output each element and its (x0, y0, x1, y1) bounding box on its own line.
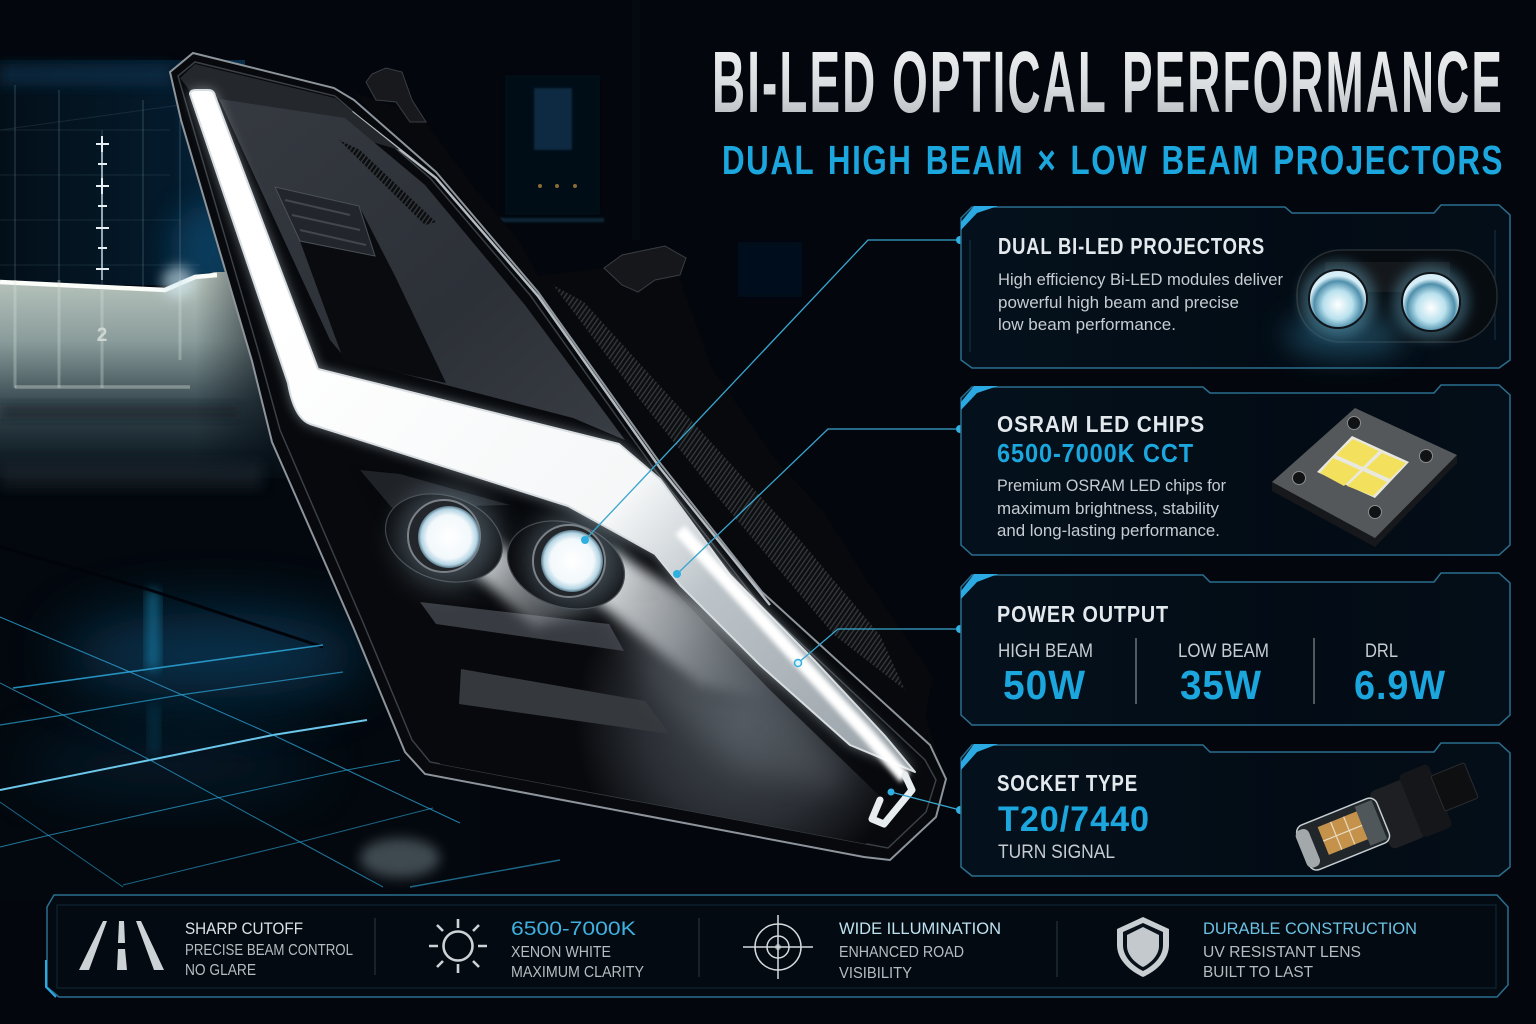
feature: colour temperature: 6500-7000K (511, 919, 636, 940)
callout line: power (794, 625, 964, 666)
rear housing silhouette (352, 92, 946, 780)
heading: SOCKET TYPE (997, 770, 1138, 796)
corner accent (961, 574, 998, 599)
feature: sharp cutoff (79, 919, 353, 979)
DRL hooked tip (872, 775, 912, 824)
DRL light bar (190, 90, 915, 824)
bar frame (47, 895, 1508, 997)
carbon textured band (553, 285, 905, 690)
light beams (455, 538, 600, 628)
panel: socket type (961, 743, 1510, 882)
heading: OSRAM LED CHIPS (997, 411, 1205, 437)
image: led chip board (1272, 408, 1457, 547)
panel frame (961, 573, 1510, 725)
socket use: TURN SIGNAL (998, 842, 1115, 863)
smoky beam haze (600, 590, 850, 790)
description: low beam performance. (998, 315, 1176, 334)
panel frame (961, 205, 1510, 368)
feature: colour temperature (429, 919, 644, 981)
description: maximum brightness, stability (997, 499, 1219, 518)
image: twin projector lenses (1285, 250, 1497, 357)
feature: sharp cutoff: PRECISE BEAM CONTROL (185, 942, 353, 959)
plastic mount right (604, 246, 686, 292)
feature: colour temperature: MAXIMUM CLARITY (511, 964, 644, 981)
stat: drl: 6.9W (1354, 662, 1446, 708)
lens outer shell (170, 53, 946, 860)
panel: osram led chips (961, 385, 1510, 555)
panel frame (961, 743, 1510, 876)
hatched strip (339, 140, 436, 225)
feature: wide illumination: VISIBILITY (839, 965, 912, 982)
description: Premium OSRAM LED chips for (997, 476, 1226, 495)
feature: wide illumination: ENHANCED ROAD (839, 944, 964, 961)
dark projector recess (345, 462, 660, 610)
aiming grid on wall (0, 85, 200, 400)
feature: durable construction: BUILT TO LAST (1203, 964, 1313, 981)
panel: bottom feature bar (46, 895, 1508, 997)
corner accent (961, 744, 998, 770)
stat: low beam: LOW BEAM (1178, 641, 1269, 662)
stat: drl (1354, 641, 1446, 708)
stat: drl: DRL (1365, 641, 1398, 662)
plastic mount top (366, 68, 426, 122)
chrome diagonal highlight (352, 112, 770, 605)
feature: durable construction (1117, 917, 1417, 981)
upper dark recess (275, 187, 446, 383)
corner accent (961, 386, 998, 410)
feature: sharp cutoff: SHARP CUTOFF (185, 919, 303, 938)
lower smoked compartment (345, 462, 890, 844)
reflective floor with blue grid (0, 462, 560, 900)
panel: dual bi-led projectors (961, 205, 1510, 368)
icon: road (79, 921, 164, 970)
feature: durable construction: UV RESISTANT LENS (1203, 944, 1361, 961)
icon: target (743, 915, 813, 979)
headlight assembly (170, 53, 946, 860)
top bezel (180, 64, 400, 150)
trim wing (360, 470, 510, 508)
callout line: socket (888, 788, 964, 814)
stat: high beam: 50W (1003, 662, 1086, 708)
colour temperature: 6500-7000K CCT (997, 438, 1194, 468)
headlight beam pattern on wall: 2 (97, 325, 107, 346)
feature: colour temperature: XENON WHITE (511, 944, 611, 961)
heading: DUAL BI-LED PROJECTORS (998, 233, 1265, 259)
stat: low beam: 35W (1180, 662, 1262, 708)
socket code: T20/7440 (998, 800, 1150, 839)
icon: shield (1117, 917, 1169, 977)
right projector (496, 507, 636, 623)
callout line: chips (673, 425, 964, 578)
callout line: projectors (581, 236, 964, 544)
stat: low beam (1178, 641, 1269, 708)
description: High efficiency Bi-LED modules deliver (998, 270, 1283, 289)
heading: POWER OUTPUT (997, 601, 1169, 627)
stat: high beam: HIGH BEAM (998, 641, 1093, 662)
feature: durable construction: DURABLE CONSTRUCTION (1203, 919, 1417, 938)
corner accent (961, 206, 998, 230)
feature: wide illumination: WIDE ILLUMINATION (839, 919, 1001, 938)
image: t20 bulb (1289, 750, 1485, 882)
inner chrome edge (178, 62, 936, 848)
lower slat two (459, 669, 670, 734)
description: and long-lasting performance. (997, 521, 1220, 540)
lower slat one (420, 602, 624, 651)
headlight beam pattern on wall (0, 266, 300, 480)
upper gray compartment (219, 99, 625, 440)
stat: high beam (998, 641, 1093, 708)
description: powerful high beam and precise (998, 293, 1239, 312)
small reflector module (275, 187, 375, 256)
left projector (374, 480, 514, 596)
feature: sharp cutoff: NO GLARE (185, 962, 256, 979)
icon: sun (429, 919, 487, 973)
panel frame (961, 385, 1510, 555)
description (998, 270, 1283, 334)
panel: power output (961, 573, 1510, 725)
feature: wide illumination (743, 915, 1001, 982)
description (997, 476, 1226, 540)
